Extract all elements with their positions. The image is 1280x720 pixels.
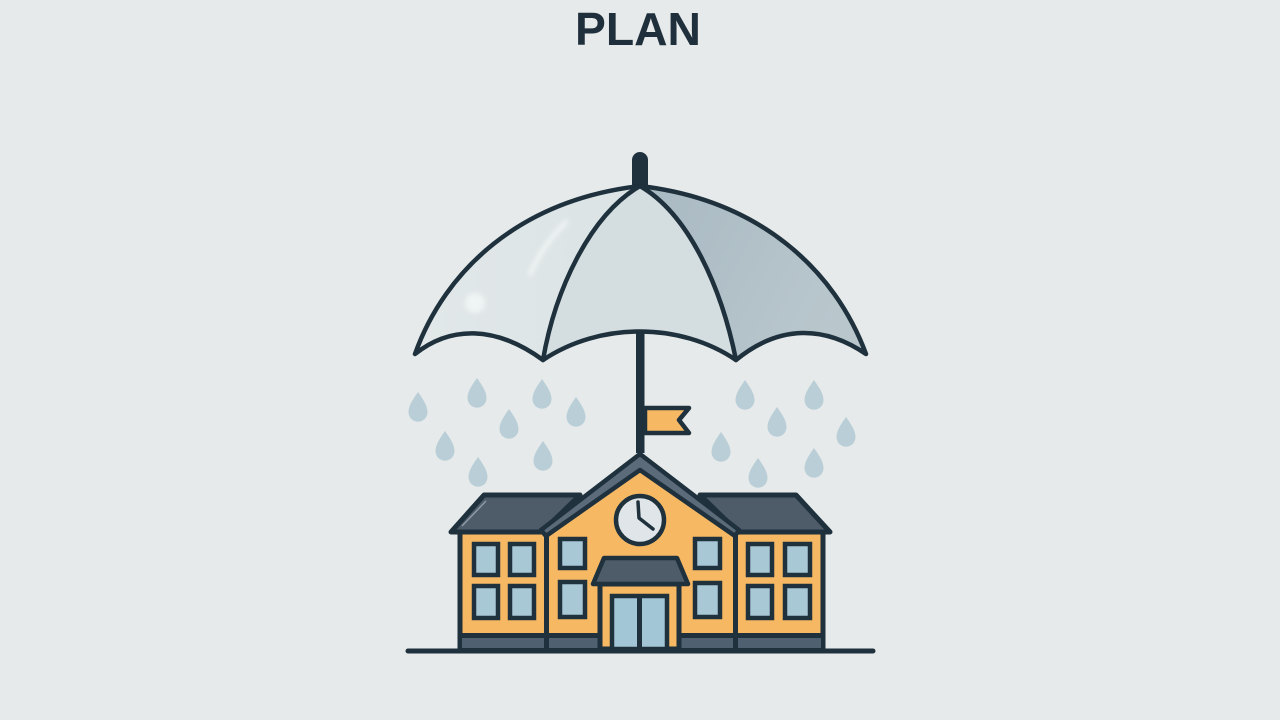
school base strip <box>462 633 821 648</box>
umbrella outline <box>415 186 866 360</box>
right side roof <box>700 495 830 532</box>
porch roof <box>593 558 688 584</box>
left side roof <box>451 495 580 532</box>
umbrella left panel <box>415 186 640 360</box>
entrance door <box>612 596 667 649</box>
umbrella middle panel <box>543 186 736 360</box>
icon: umbrella pole <box>636 331 644 453</box>
school dividers <box>544 530 738 649</box>
porch <box>600 584 679 649</box>
ground line <box>408 648 873 654</box>
windows <box>474 539 810 618</box>
icon: umbrella <box>415 152 866 360</box>
school wings and walls <box>460 528 823 649</box>
icon: flag <box>645 408 689 433</box>
central gable roof <box>541 454 739 536</box>
icon: raindrops <box>408 378 856 488</box>
school central gable wall <box>546 462 735 640</box>
icon: school building <box>451 454 830 649</box>
clock <box>616 496 664 544</box>
umbrella right panel <box>640 186 866 360</box>
umbrella highlights <box>465 222 566 313</box>
umbrella handle tip <box>632 152 648 187</box>
title: PLAN <box>575 3 701 55</box>
left roof highlight <box>462 501 486 526</box>
